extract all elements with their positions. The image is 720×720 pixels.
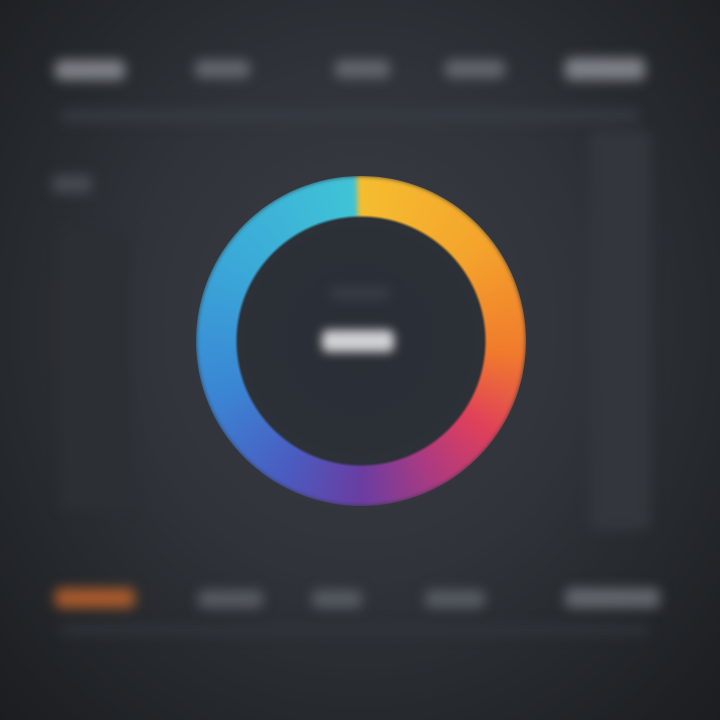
bottom label 4 <box>425 590 485 608</box>
subline row <box>60 110 640 122</box>
bottom row <box>47 580 666 634</box>
bottom subline <box>60 625 650 635</box>
header 5 <box>565 58 645 80</box>
top header row <box>48 50 652 122</box>
center glow <box>220 200 500 480</box>
center subtitle <box>330 288 390 298</box>
donut ring chart <box>196 176 526 506</box>
right column text <box>590 130 650 530</box>
header 4 <box>445 60 505 78</box>
left side label <box>52 175 92 193</box>
bottom label 5 <box>565 588 660 608</box>
center label <box>322 330 394 352</box>
left column text <box>60 230 130 510</box>
bottom label 3 <box>312 590 362 608</box>
bottom label orange <box>55 588 135 608</box>
header 3 <box>335 60 390 78</box>
header 1 <box>55 60 125 80</box>
bottom label 2 <box>198 590 263 608</box>
header 2 <box>195 60 250 78</box>
